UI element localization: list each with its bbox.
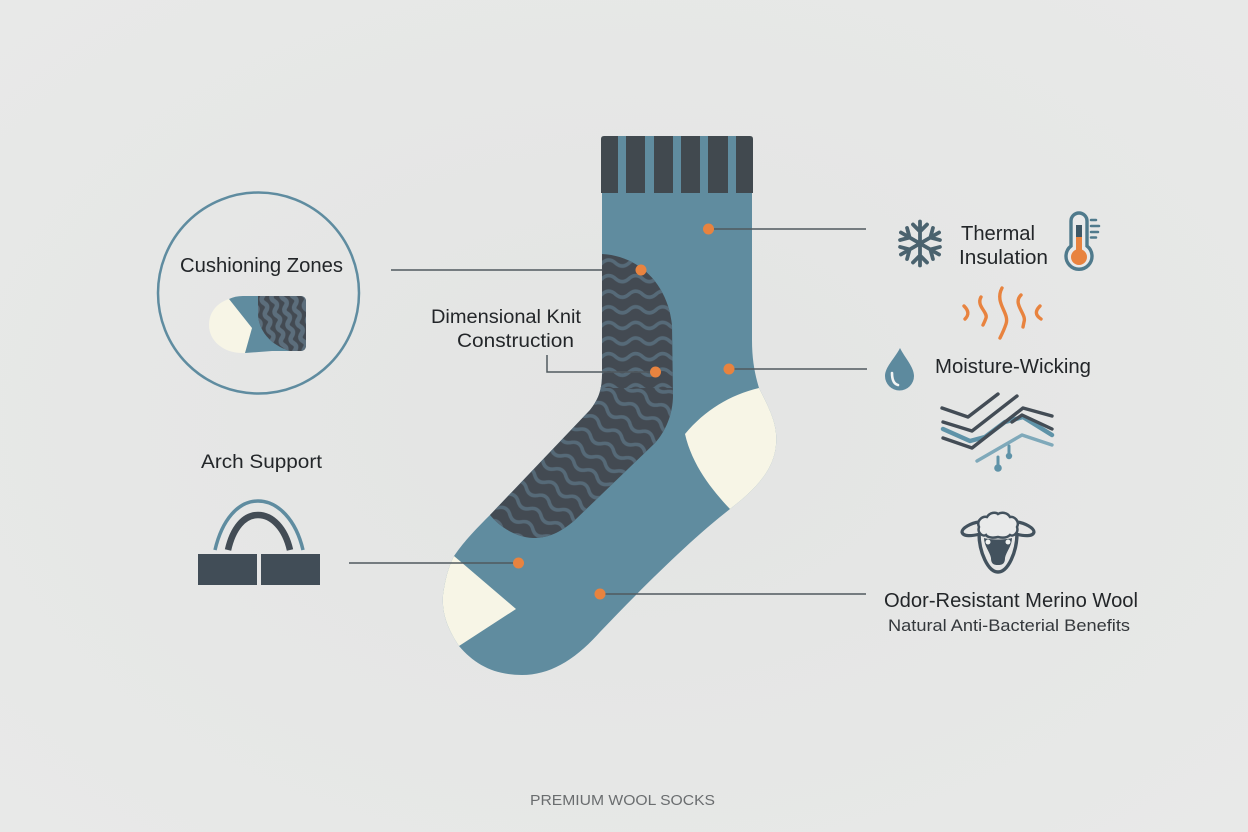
sublabel: natural anti-bacterial benefits: Natural Anti-Bacterial Benefits — [888, 616, 1130, 635]
label: insulation: Insulation — [959, 247, 1048, 269]
toe cream zone — [443, 556, 516, 646]
icon: heat waves — [964, 288, 1041, 338]
label line 1: Dimensional Knit — [431, 307, 582, 328]
icon: thermometer — [1066, 213, 1099, 269]
infographic canvas — [156, 136, 1137, 805]
dimensional knit patch — [490, 254, 673, 538]
panel: thermal insulation — [897, 213, 1099, 338]
panel: moisture-wicking — [885, 348, 1091, 472]
cuff top teal strip — [618, 136, 736, 140]
heading: cushioning zones: Cushioning Zones — [180, 255, 343, 277]
footer caption: PREMIUM WOOL SOCKS — [530, 792, 715, 809]
icon: water drop — [885, 348, 914, 390]
icon: fabric layers — [942, 394, 1052, 472]
label line 2: Construction — [457, 331, 574, 352]
callout lines — [349, 229, 867, 594]
icon: sheep — [962, 513, 1034, 572]
label: thermal: Thermal — [961, 223, 1035, 245]
panel: arch support — [198, 451, 323, 585]
label: dimensional knit construction — [431, 307, 582, 352]
label: moisture-wicking: Moisture-Wicking — [935, 356, 1091, 378]
mini sock cross-section — [209, 296, 306, 353]
label: odor-resistant merino wool: Odor-Resistant Merino Wool — [884, 590, 1138, 612]
callout dots — [513, 224, 734, 600]
icon: arch — [198, 501, 320, 585]
sock cuff ribbing — [601, 136, 753, 193]
sock body — [443, 140, 776, 675]
panel: odor-resistant merino wool — [884, 513, 1138, 635]
heel cream zone — [685, 388, 776, 509]
sock illustration — [443, 136, 776, 675]
heading: arch support: Arch Support — [201, 451, 323, 473]
panel: cushioning zones — [158, 192, 359, 394]
icon: snowflake — [897, 222, 943, 266]
circle outline — [158, 192, 359, 394]
